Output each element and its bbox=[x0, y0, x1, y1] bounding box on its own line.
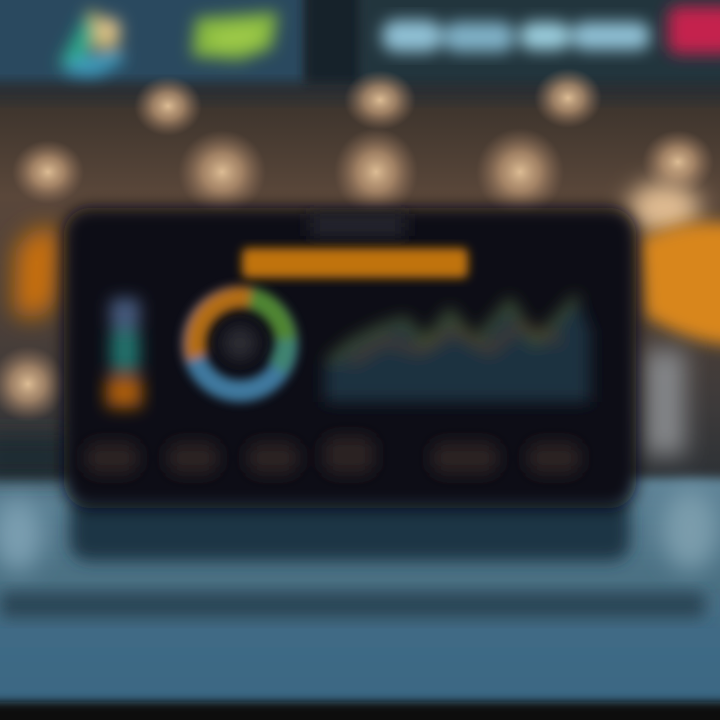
icon: green banner badge bbox=[192, 12, 278, 60]
laptop bbox=[64, 208, 636, 561]
metric tiles bbox=[86, 436, 580, 474]
donut centre bbox=[222, 325, 258, 361]
top banner: screens bbox=[0, 0, 720, 100]
icon: pink tag bbox=[668, 6, 720, 54]
laptop screen bezel bbox=[64, 208, 636, 508]
dashboard header bar bbox=[242, 248, 468, 278]
blurred screen text bbox=[382, 20, 650, 52]
dashboard top strip bbox=[310, 214, 405, 236]
area chart bbox=[325, 296, 590, 402]
ceiling and wall lights bbox=[0, 68, 714, 422]
laptop base bbox=[70, 495, 630, 561]
donut chart bbox=[193, 297, 287, 391]
orange object left bbox=[14, 228, 60, 318]
sidebar gauge bbox=[106, 298, 142, 408]
icon: colourful triangle logo bbox=[58, 8, 126, 76]
orange object right bbox=[628, 182, 720, 455]
desk surface bbox=[0, 435, 720, 720]
background wall bbox=[0, 70, 720, 490]
